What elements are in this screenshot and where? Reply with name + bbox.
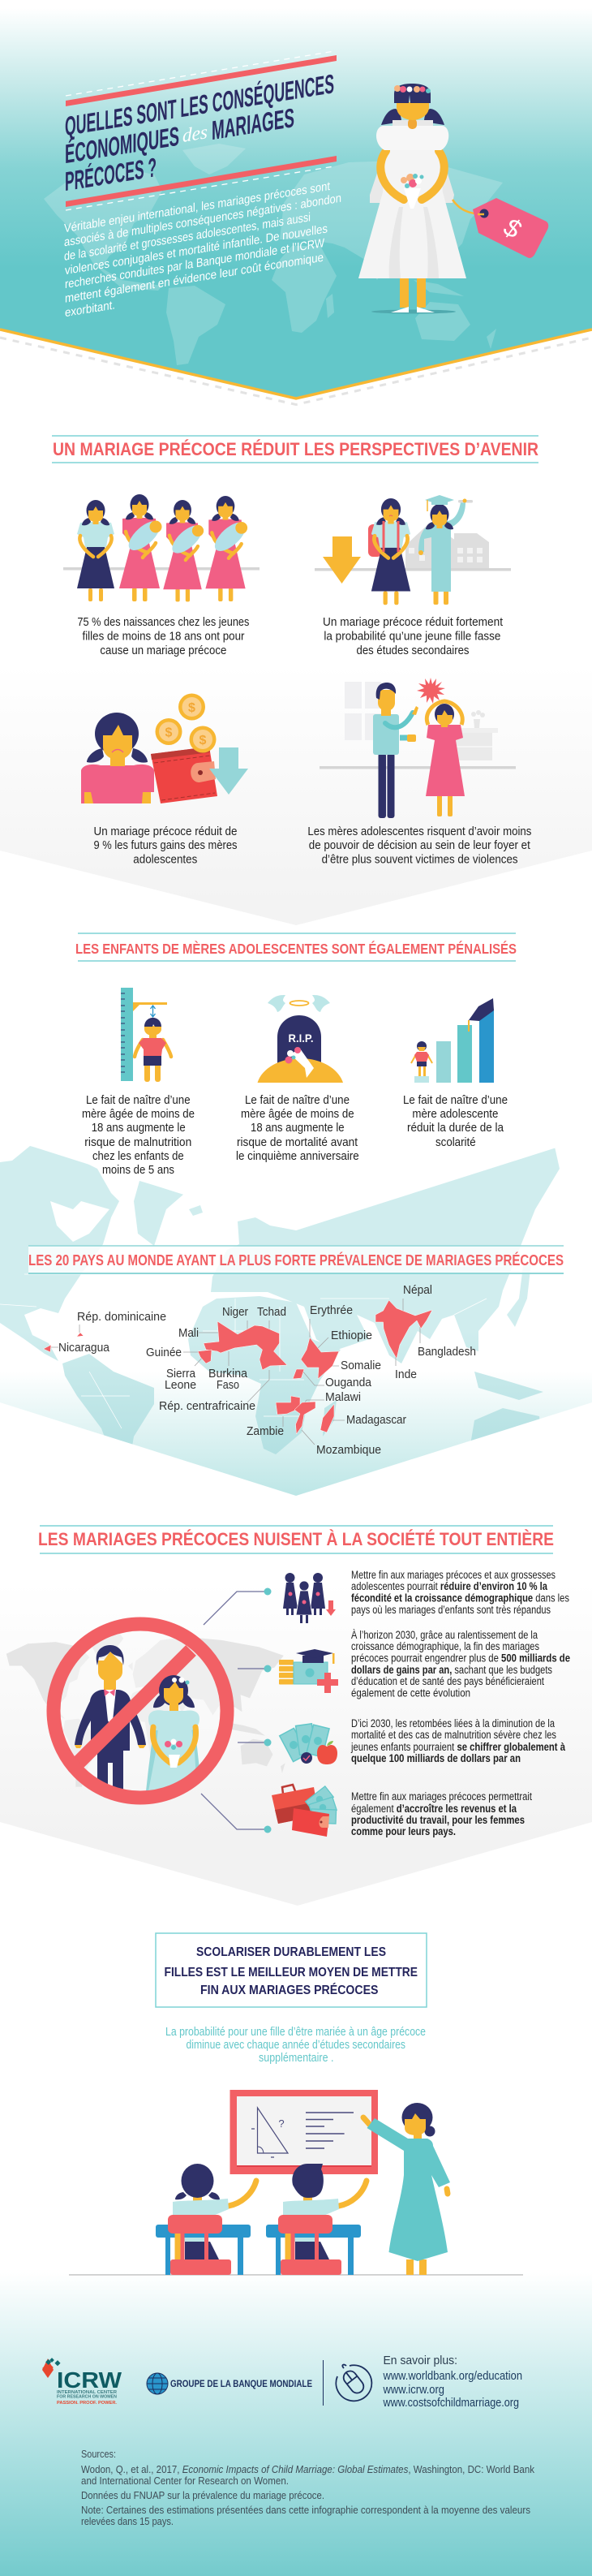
text: mortality: Le fait de naître d’une [245, 1093, 350, 1107]
teal statement text: supplémentaire . [259, 2051, 334, 2065]
intro paragraph: violences conjugales et mortalité infantile. De nouvelles [65, 222, 328, 278]
divider [323, 2360, 324, 2406]
section heading: perspectives: UN MARIAGE PRÉCOCE RÉDUIT LES PERSPECTIVES D’AVENIR [53, 439, 538, 459]
logo: ICRW: FOR RESEARCH ON WOMEN [57, 2394, 117, 2399]
further information links: www.worldbank.org/education [383, 2370, 522, 2383]
panel: hero header [0, 0, 592, 404]
text: 75 % of births: cause un mariage précoce [100, 644, 226, 657]
icon: briefcase and wallet [272, 1785, 337, 1837]
title [65, 68, 334, 197]
girl with backpack [368, 498, 410, 605]
country labels: Erythrée [310, 1303, 353, 1317]
country labels: Zambie [247, 1424, 284, 1438]
text: 500 billion [351, 1629, 570, 1699]
text: decision power: d’être plus souvent victimes de violences [322, 852, 518, 867]
country labels: Mali [178, 1326, 199, 1340]
logo: World Bank Group: GROUPE DE LA BANQUE MONDIALE [170, 2378, 312, 2389]
country labels: Népal [403, 1283, 432, 1297]
text: schooling: Le fait de naître d’une [403, 1093, 508, 1107]
sources: Note: Certaines des estimations présentées dans cette infographie correspondent à la moyenne des valeurs [81, 2505, 530, 2516]
text: mortality: le cinquième anniversaire [236, 1149, 359, 1163]
icon: wallet [151, 726, 217, 803]
connector lines [201, 1587, 271, 1833]
icon: coins [156, 693, 205, 745]
country labels: Rép. centrafricaine [159, 1399, 255, 1413]
intro paragraph: recherches conduites par la Banque mondiale et l’ICRW [65, 236, 325, 291]
text: 500 billion: dollars de gains par an, sachant que les budgets [351, 1664, 552, 1676]
text: 500 billion: croissance démographique, la fin des mariages [351, 1640, 539, 1652]
groom [75, 1645, 146, 1794]
illustration: girl with falling earnings [81, 693, 248, 803]
text: decision power: Les mères adolescentes risquent d’avoir moins [307, 825, 531, 838]
panel: gray background section 4 [0, 1583, 592, 1906]
callout box: FIN AUX MARIAGES PRÉCOCES [200, 1982, 379, 1997]
text: 500 billion: également de cette évolution [351, 1686, 470, 1699]
sources: and International Center for Research on Women. [81, 2475, 289, 2487]
logo: ICRW [42, 2358, 122, 2406]
text: mortality: 18 ans augmente le [251, 1121, 345, 1135]
icon: yellow down arrow [323, 536, 361, 584]
map: highlighted countries [44, 1283, 476, 1457]
text: fertility [351, 1569, 569, 1616]
country labels: Ethiopie [331, 1329, 372, 1342]
illustration: domestic violence scene [320, 678, 516, 818]
icon: wallet: $ [199, 734, 207, 747]
title: MARIAGES [212, 103, 294, 146]
country labels: Rép. dominicaine [77, 1310, 166, 1324]
country labels: Somalie [341, 1359, 381, 1372]
text: schooling [403, 1093, 508, 1149]
text: 75 % of births: 75 % des naissances chez les jeunes [77, 615, 249, 629]
country labels: Sierra [166, 1367, 196, 1381]
country labels: Malawi [325, 1390, 361, 1404]
text: 100 billion: quelque 100 milliards de dollars par an [351, 1752, 521, 1764]
logo: World Bank Group [147, 2373, 312, 2394]
teal statement text: diminue avec chaque année d’études secondaires [187, 2038, 405, 2052]
teal statement text [165, 2025, 426, 2065]
text: 75 % of births [77, 615, 249, 657]
text: malnutrition: risque de malnutrition [84, 1135, 191, 1149]
blackboard [230, 2090, 378, 2174]
text: productivity: également d’accroître les revenus et la [351, 1803, 517, 1815]
country labels [58, 1283, 476, 1457]
panel: map background [0, 1136, 592, 1496]
title: QUELLES SONT LES CONSÉQUENCES [65, 68, 334, 142]
text: 500 billion: précoces pourrait engendrer plus de 500 milliards de [351, 1652, 570, 1664]
text: fertility: pays où les mariages d’enfants sont très répandus [351, 1604, 551, 1616]
section heading: children: LES ENFANTS DE MÈRES ADOLESCENTES SONT ÉGALEMENT PÉNALISÉS [75, 940, 517, 957]
intro paragraph [64, 178, 341, 320]
intro paragraph: mettent également en évidence leur coût économique [65, 251, 324, 306]
bride with bouquet [146, 1675, 199, 1791]
country labels: Leone [165, 1378, 196, 1392]
chevron yellow border [0, 330, 592, 398]
further information links: www.costsofchildmarriage.org [383, 2397, 519, 2410]
icon: women with lower fertility [283, 1573, 336, 1623]
country labels: Niger [222, 1305, 248, 1319]
further information links: En savoir plus: [383, 2354, 457, 2367]
text: malnutrition: Le fait de naître d’une [86, 1093, 191, 1107]
country labels: Burkina [208, 1367, 248, 1381]
panel: footer gradient [0, 2272, 592, 2576]
country labels: Mozambique [316, 1443, 381, 1457]
text: malnutrition [82, 1093, 195, 1177]
text: malnutrition: 18 ans augmente le [92, 1121, 186, 1135]
country labels: Faso [217, 1378, 239, 1392]
text: schooling: réduit la durée de la [407, 1121, 504, 1135]
text: secondary school probability: des études secondaires [357, 644, 469, 657]
icon: impact burst [417, 678, 445, 704]
sources: Données du FNUAP sur la prévalence du mariage précoce. [81, 2490, 324, 2501]
callout box [156, 1933, 427, 2007]
callout box: FILLES EST LE MEILLEUR MOYEN DE METTRE [164, 1966, 418, 1979]
text: productivity: comme pour leurs pays. [351, 1825, 456, 1837]
text: 500 billion: d’éducation et de santé des pays bénéficieraient [351, 1675, 544, 1687]
intro paragraph: Véritable enjeu international, les mariages précoces sont [64, 179, 331, 235]
teal statement text: La probabilité pour une fille d’être mariée à un âge précoce [165, 2025, 426, 2039]
country labels: Inde [395, 1368, 417, 1381]
text: schooling: mère adolescente [412, 1107, 498, 1121]
icon: education and health budgets [279, 1649, 338, 1693]
country labels: Ouganda [325, 1376, 372, 1389]
sources: Sources: [81, 2449, 116, 2460]
illustration: gravestone: R.I.P. [289, 1032, 313, 1045]
intro paragraph: exorbitant. [65, 298, 115, 320]
text: 9 % earnings: 9 % les futurs gains des mères [94, 838, 237, 852]
further information links: www.icrw.org [383, 2384, 444, 2397]
sources: Wodon, Q., et al., 2017, Economic Impacts of Child Marriage: Global Estimates, Washington, DC: World Bank [81, 2464, 535, 2475]
logo: ICRW: PASSION. PROOF. POWER. [57, 2401, 117, 2406]
icon: mouse [336, 2365, 371, 2401]
panel: gray background section 2 [0, 666, 592, 925]
text: 100 billion [350, 1717, 565, 1764]
icon: coins: $ [165, 726, 173, 740]
text: 9 % earnings: adolescentes [133, 852, 197, 867]
icon: teal down arrow [209, 747, 248, 795]
student girl [156, 2164, 256, 2275]
text: 9 % earnings [94, 825, 237, 867]
text: productivity: Mettre fin aux mariages précoces permettrait [351, 1790, 532, 1803]
blackboard: ? [278, 2117, 285, 2130]
text: decision power [307, 825, 531, 867]
text: mortality: risque de mortalité avant [237, 1135, 358, 1149]
illustration: school graduation drop [315, 495, 511, 605]
text: 75 % of births: filles de moins de 18 ans ont pour [83, 630, 245, 643]
title: des [182, 121, 208, 147]
teacher [363, 2103, 450, 2275]
text: 500 billion: À l’horizon 2030, grâce au ralentissement de la [351, 1629, 538, 1641]
title ribbon bottom [66, 156, 337, 210]
text: schooling: scolarité [435, 1135, 476, 1149]
title ribbon top [66, 51, 337, 106]
illustration: prohibited child marriage [54, 1624, 227, 1798]
illustration: bride with price tag: $ [499, 211, 526, 245]
text: decision power: de pouvoir de décision au sein de leur foyer et [309, 838, 531, 852]
country labels: Nicaragua [58, 1341, 110, 1355]
illustration: child height ruler [121, 988, 171, 1082]
illustration: schooling bars [411, 998, 494, 1083]
sources: relevées dans 15 pays. [81, 2516, 174, 2527]
chevron dashes [0, 338, 592, 404]
man [373, 683, 418, 818]
country labels: Tchad [257, 1305, 286, 1319]
title: ÉCONOMIQUES [65, 121, 179, 170]
illustration: gravestone [258, 995, 343, 1083]
text: malnutrition: mère âgée de moins de [82, 1107, 195, 1121]
callout box: SCOLARISER DURABLEMENT LES [196, 1945, 386, 1959]
text: secondary school probability: Un mariage précoce réduit fortement [323, 615, 504, 629]
logo: ICRW: ICRW [57, 2367, 122, 2393]
logo: ICRW: INTERNATIONAL CENTER [57, 2390, 117, 2395]
world map silhouette [44, 144, 503, 365]
illustration: bride with price tag [358, 84, 548, 313]
country labels: Madagascar [346, 1413, 406, 1427]
student boy [266, 2164, 367, 2275]
further information links [383, 2354, 522, 2410]
text: fertility: fécondité et la croissance démographique dans les [351, 1592, 569, 1604]
text: secondary school probability [323, 615, 504, 657]
text: fertility: adolescentes pourrait réduire d’environ 10 % la [351, 1580, 547, 1592]
icon: coins: $ [188, 701, 195, 715]
intro paragraph: de la scolarité et grossesses adolescentes, mais aussi [64, 210, 311, 264]
country labels: Guinée [146, 1346, 182, 1359]
gray world map [6, 1630, 285, 1787]
text: mortality: mère âgée de moins de [241, 1107, 354, 1121]
country labels: Bangladesh [418, 1345, 476, 1359]
illustration: classroom [69, 2090, 523, 2276]
prohibition slash [79, 1651, 191, 1763]
text: 9 % earnings: Un mariage précoce réduit de [94, 825, 237, 838]
text: productivity: productivité du travail, pour les femmes [351, 1814, 525, 1826]
text: mortality [236, 1093, 359, 1163]
text: malnutrition: moins de 5 ans [102, 1163, 174, 1177]
title: PRÉCOCES ? [65, 152, 157, 197]
icon: money and apple [280, 1724, 337, 1764]
graduate girl [418, 495, 473, 605]
woman [426, 701, 465, 816]
text: malnutrition: chez les enfants de [92, 1149, 184, 1163]
text: productivity [351, 1790, 532, 1837]
text: 100 billion: jeunes enfants pourraient se chiffrer globalement à [350, 1741, 565, 1753]
leader lines [51, 1299, 420, 1445]
illustration: four young girls [63, 494, 260, 601]
intro paragraph: associés à de multiples conséquences négatives : abondon [64, 192, 341, 249]
section heading: 20 countries [28, 1246, 564, 1273]
text: secondary school probability: la probabilité qu’une jeune fille fasse [324, 630, 500, 643]
sources [81, 2449, 535, 2527]
